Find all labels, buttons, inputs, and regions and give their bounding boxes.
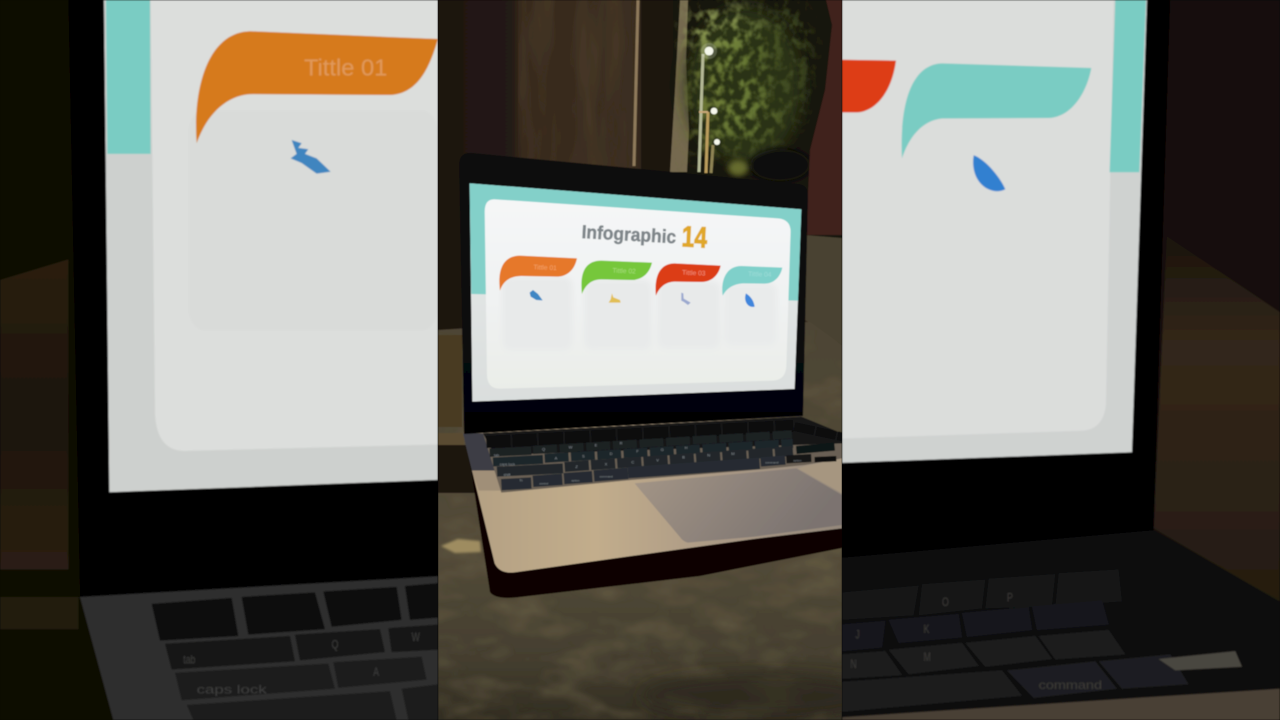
left background ground [0, 259, 68, 569]
left banner title: Tittle 01 [304, 56, 387, 81]
laptop lid [459, 153, 808, 434]
dark gap beside wall [641, 0, 673, 180]
key labels: caps lock [500, 462, 515, 466]
key labels [494, 441, 802, 486]
left key labels [183, 632, 420, 697]
key labels: B [682, 455, 685, 460]
right base highlight [798, 458, 842, 493]
heading [581, 220, 708, 255]
key labels: tab [494, 454, 499, 458]
card 2 [581, 261, 652, 350]
key labels: R [620, 441, 623, 446]
left screen background [104, 0, 438, 492]
key labels: N [707, 453, 710, 458]
heading number: 14 [681, 220, 708, 255]
dark side strip [463, 433, 495, 471]
key labels: X [605, 461, 608, 466]
tree trunk [806, 0, 842, 235]
left keyboard base [80, 576, 438, 720]
number row [486, 426, 793, 442]
right key labels: P [1007, 592, 1013, 605]
card 1 banner [499, 256, 577, 291]
right keyboard keys [842, 569, 1262, 712]
key labels: S [582, 453, 585, 458]
right background ground [1154, 236, 1280, 602]
key labels: Z [575, 464, 578, 469]
right key labels: O [942, 597, 949, 610]
screen background [470, 183, 801, 402]
right key labels: N [850, 659, 857, 672]
key labels: A [555, 455, 558, 460]
streaked ground left of laptop [438, 335, 462, 427]
key labels: G [661, 447, 664, 452]
laptop [459, 153, 842, 573]
heading word: Infographic [581, 221, 677, 247]
left white panel [151, 0, 438, 451]
trackpad [635, 468, 842, 543]
far right keys [795, 427, 842, 437]
card 2 icon [609, 293, 621, 303]
card 1 body [502, 277, 573, 351]
base shell [463, 417, 842, 573]
card 3 title: Tittle 03 [682, 270, 706, 277]
caps row [493, 443, 793, 462]
dark foreground ground [640, 673, 880, 717]
right laptop bezel [842, 0, 1170, 558]
left key labels: Q [332, 639, 338, 652]
card 1 title: Tittle 01 [533, 264, 557, 272]
left key labels: tab [183, 654, 196, 667]
right red banner piece [842, 60, 896, 113]
right white panel [842, 0, 1114, 439]
key labels: control [539, 482, 549, 486]
key labels: W [569, 445, 573, 450]
right blue leaf icon [973, 155, 1005, 191]
wall streaks [518, 0, 619, 168]
card 4 banner [722, 266, 782, 296]
laptop screen [470, 183, 801, 402]
street lamp posts [699, 54, 713, 173]
key labels: M [731, 451, 735, 456]
key labels: V [656, 457, 659, 462]
left laptop bezel [68, 0, 438, 597]
right keyboard base [842, 530, 1280, 720]
white content panel [485, 199, 791, 389]
left teal strip [106, 0, 151, 154]
key labels: Q [542, 447, 545, 452]
card 3 body [657, 281, 721, 349]
right key labels: command [1039, 680, 1102, 692]
teal header band [470, 183, 801, 301]
foliage [686, 0, 811, 160]
left keyboard keys [152, 583, 438, 720]
dim tree canopy glow [685, 5, 805, 165]
key labels: command [600, 475, 613, 479]
key labels: shift [504, 473, 510, 477]
key labels: H [685, 445, 688, 450]
bottom row [501, 460, 785, 485]
left blue icon [291, 140, 331, 174]
card 4 [722, 266, 782, 346]
left card [188, 110, 438, 331]
background wall [438, 0, 808, 330]
pale pillar [670, 0, 689, 172]
key labels: command [765, 460, 779, 464]
right bottom palm-rest edge [842, 689, 1280, 720]
card 2 title: Tittle 02 [612, 268, 636, 275]
card 2 body [584, 279, 652, 350]
card 4 body [724, 283, 777, 346]
left key labels: A [373, 667, 379, 679]
card 3 banner [656, 263, 721, 296]
right key labels: K [924, 624, 929, 636]
right key labels: M [924, 652, 931, 665]
card 2 banner [581, 261, 652, 294]
right teal strip [1110, 0, 1146, 172]
card 3 icon [681, 293, 691, 305]
shift row [497, 447, 835, 472]
keyboard well [483, 417, 842, 493]
street lamps [701, 43, 720, 145]
key labels: F [636, 448, 639, 453]
card 1 [499, 256, 577, 351]
dark ground patch left of laptop [438, 445, 478, 493]
thin wall pole [634, 0, 638, 166]
card 1 icon [530, 290, 543, 300]
keyboard rows [486, 426, 842, 485]
card 4 icon [745, 293, 755, 307]
right blurred panel: zoomed laptop screen [842, 0, 1280, 720]
ground mottling [438, 330, 842, 720]
laptop shadow [463, 433, 842, 598]
low wall at right [805, 235, 842, 345]
card 4 title: Tittle 04 [748, 271, 772, 279]
right teal banner [902, 63, 1091, 158]
right screen background [842, 0, 1147, 463]
right key labels [850, 592, 1102, 692]
card 3 [656, 263, 721, 349]
left key labels: caps lock [197, 684, 268, 697]
right key labels: J [855, 629, 860, 642]
centre photo [438, 0, 880, 720]
bush near base of lamps [728, 160, 748, 176]
alley background [673, 0, 842, 240]
ground surface [438, 322, 842, 720]
key labels: C [631, 459, 634, 464]
key labels: D [610, 451, 613, 456]
key labels: E [595, 443, 598, 448]
pale stone patch [441, 539, 481, 553]
key labels: option [571, 479, 580, 483]
left key labels: W [412, 632, 420, 644]
key labels: fn [520, 479, 523, 483]
key labels: option [793, 458, 802, 462]
dark shrubs low in the alley [750, 149, 810, 181]
left blurred panel: zoomed laptop screen [0, 0, 438, 720]
tab row [490, 434, 792, 453]
left orange banner [196, 31, 438, 143]
laptop base and keyboard [463, 417, 842, 573]
